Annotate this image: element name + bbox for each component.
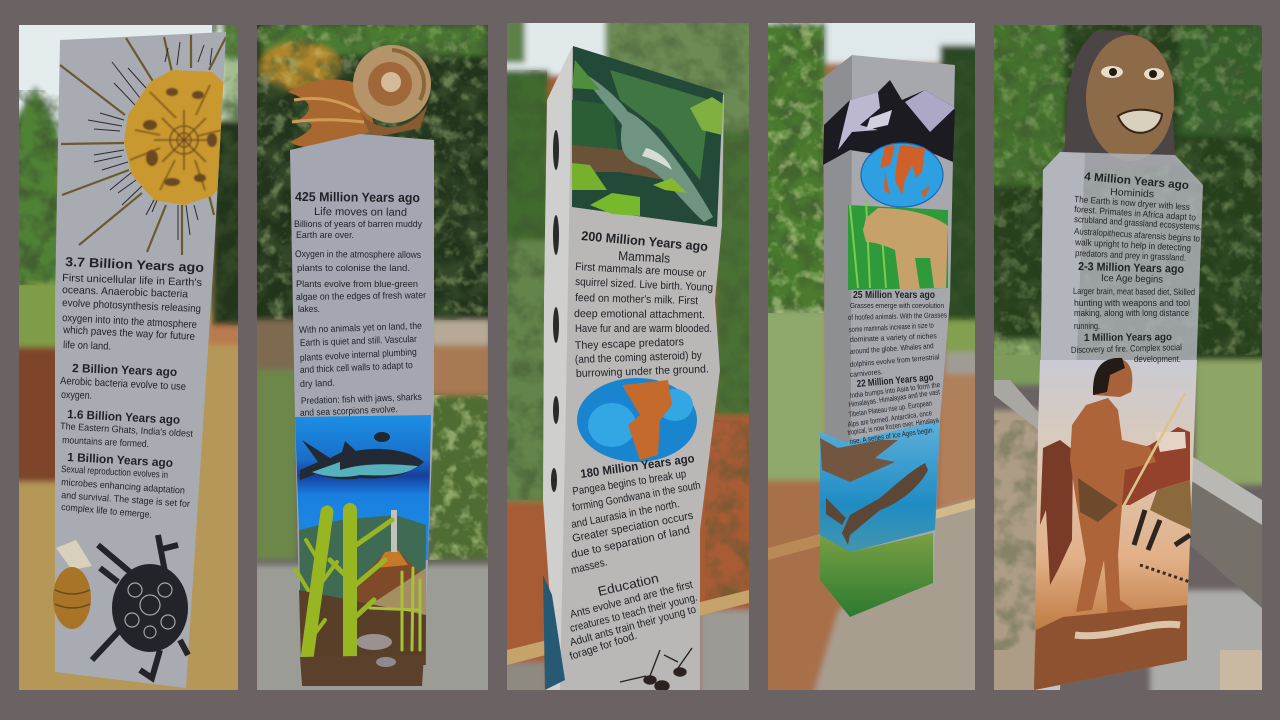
text: pillar 2 timeline: and sea scorpions evolve. bbox=[300, 404, 398, 419]
text: pillar 5 timeline: predators and prey in grassland. bbox=[1075, 248, 1186, 263]
text: pillar 2 timeline: plants evolve internal plumbing bbox=[300, 347, 417, 364]
text: pillar 5 timeline: scrubland and grassland ecosystems. bbox=[1074, 214, 1202, 232]
text: 180 million years ago and education: Ants evolve and are the first bbox=[569, 579, 694, 621]
painting: volcano and prehistoric plants bbox=[296, 510, 426, 686]
text: pillar 1 timeline: First unicellular life in Earth's bbox=[62, 272, 202, 289]
text: 180 million years ago and education bbox=[568, 451, 702, 663]
text: pillar 4 timeline: around the globe. Whales and bbox=[850, 341, 934, 356]
pillar side face bbox=[820, 55, 852, 617]
text: 180 million years ago and education: masses. bbox=[570, 556, 609, 577]
sculpture: hominid head bbox=[1062, 30, 1176, 170]
painting: lower side panel bbox=[543, 575, 565, 690]
text: 180 million years ago and education: due to separation of land bbox=[570, 524, 691, 561]
icon: black turtle-like creature painting bbox=[92, 535, 188, 678]
text: pillar 5 timeline: 4 Million Years ago bbox=[1084, 171, 1189, 192]
text: pillar 1 timeline: Sexual reproduction evolves in bbox=[61, 464, 168, 481]
text: pillar 1 timeline bbox=[60, 254, 204, 521]
pillar side face bbox=[1034, 152, 1085, 690]
text: pillar 2 timeline: Earth is quiet and still. Vascular bbox=[300, 334, 417, 349]
text: pillar 2 timeline: 425 Million Years ago bbox=[295, 189, 420, 205]
garden background bbox=[984, 15, 1272, 700]
icon: sun painting bbox=[60, 35, 226, 255]
text: pillar 2 timeline: Plants evolve from blue-green bbox=[296, 279, 418, 290]
text: pillar 1 timeline: oxygen. bbox=[61, 389, 92, 402]
text: pillar 1 timeline: which paves the way for future bbox=[62, 324, 195, 343]
text: pillar 5 timeline: making, along with long distance bbox=[1074, 308, 1189, 318]
text: pillar 4 timeline: Alps are formed. Antarctica, once bbox=[847, 408, 932, 429]
text: pillar 4 timeline: dolphins evolve from terrestrial bbox=[849, 352, 940, 369]
concrete walls bbox=[994, 380, 1262, 690]
wooden edging bbox=[768, 534, 820, 560]
text: pillar 2 timeline: dry land. bbox=[300, 378, 335, 390]
icon: globe with Pangea bbox=[577, 378, 697, 462]
text: pillar 5 timeline: Australopithecus afarensis begins to bbox=[1074, 226, 1200, 244]
text: pillar 2 timeline bbox=[294, 189, 426, 419]
garden background bbox=[247, 15, 497, 695]
panel: 425 million years ago bbox=[247, 15, 497, 695]
text: 180 million years ago and education: forage for food. bbox=[568, 630, 639, 663]
text: pillar 4 timeline: some mammals increase in size to bbox=[849, 321, 934, 334]
panel: 200 million years ago bbox=[507, 23, 749, 690]
text: pillar 4 timeline: Himalayas. Himalayas and the vast bbox=[848, 387, 941, 409]
text: pillar 1 timeline: mountains are formed. bbox=[62, 435, 149, 450]
pillar front face bbox=[560, 47, 724, 690]
text: 180 million years ago and education: 180 Million Years ago bbox=[579, 451, 695, 481]
text: 180 million years ago and education: Pangea begins to break up bbox=[572, 468, 687, 498]
garden background bbox=[19, 25, 238, 690]
text: 200 million years ago bbox=[574, 228, 713, 380]
text: pillar 5 timeline: walk upright to help in detecting bbox=[1074, 237, 1191, 253]
text: pillar 5 timeline: forest. Primates in Africa adapt to bbox=[1074, 204, 1196, 223]
icon: clay pot painting bbox=[53, 540, 92, 629]
painting: ocean with shark bbox=[295, 415, 431, 560]
text: pillar 4 timeline: Tibetan Plateau rise up. European bbox=[848, 398, 932, 419]
painting: early human hunter with cave art bbox=[1034, 358, 1197, 690]
text: pillar 4 timeline: 25 Million Years ago bbox=[853, 290, 935, 301]
text: pillar 2 timeline: Oxygen in the atmosphere allows bbox=[295, 249, 421, 261]
pillar side face bbox=[543, 47, 575, 690]
text: pillar 2 timeline: algae on the edges of fresh water bbox=[296, 290, 426, 303]
text: pillar 2 timeline: lakes. bbox=[298, 304, 320, 315]
text: pillar 4 timeline bbox=[847, 290, 947, 446]
painting: mountains bbox=[823, 80, 955, 165]
text: pillar 1 timeline: 1.6 Billion Years ago bbox=[67, 407, 180, 427]
text: pillar 5 timeline: 2-3 Million Years ago bbox=[1078, 261, 1184, 276]
text: pillar 4 timeline: rise. A series of Ice Ages begin. bbox=[849, 425, 934, 446]
text: pillar 1 timeline: microbes enhancing adaptation bbox=[61, 477, 185, 497]
pillar front face bbox=[850, 55, 955, 617]
text: pillar 1 timeline: 2 Billion Years ago bbox=[72, 361, 177, 379]
sculpture: nautilus bbox=[288, 45, 431, 148]
text: pillar 5 timeline: Hominids bbox=[1110, 187, 1154, 200]
text: 180 million years ago and education: Education bbox=[596, 570, 660, 599]
text: pillar 1 timeline: and survival. The stage is set for bbox=[61, 490, 190, 510]
pillar front face bbox=[1034, 152, 1203, 690]
painting: early mammal on branch bbox=[572, 46, 723, 227]
text: 200 million years ago: Mammals bbox=[618, 248, 671, 266]
text: pillar 1 timeline: complex life to emerge. bbox=[61, 502, 152, 521]
pillar stone bbox=[55, 32, 226, 688]
text: 180 million years ago and education: Adult ants train their young to bbox=[569, 604, 697, 649]
text: 180 million years ago and education: creatures to teach their young. bbox=[569, 592, 699, 635]
text: pillar 5 timeline: 1 Million Years ago bbox=[1084, 331, 1172, 344]
icon: globe bbox=[861, 143, 943, 207]
text: pillar 1 timeline: oceans. Anaerobic bacteria bbox=[62, 284, 188, 300]
text: pillar 4 timeline: 22 Million Years ago bbox=[856, 372, 934, 390]
text: pillar 4 timeline: tropical, is now frozen over. Himalaya bbox=[847, 415, 940, 437]
text: pillar 2 timeline: Billions of years of barren muddy bbox=[294, 219, 422, 230]
panel: 25 and 22 million years ago bbox=[768, 23, 975, 690]
text: 200 million years ago: They escape predators bbox=[575, 336, 685, 352]
text: 180 million years ago and education: forming Gondwana in the south bbox=[571, 480, 702, 514]
text: pillar 5 timeline: hunting with weapons and tool bbox=[1074, 298, 1190, 308]
text: pillar 4 timeline: of hoofed animals. With the Grasses bbox=[848, 310, 947, 322]
panel: 4 million to 1 million years ago bbox=[984, 15, 1272, 700]
panel: 3.7 billion to 1 billion years ago bbox=[19, 25, 238, 690]
text: pillar 1 timeline: Aerobic bacteria evolve to use bbox=[60, 375, 186, 393]
text: pillar 5 timeline: running. bbox=[1074, 321, 1100, 331]
text: 200 million years ago: deep emotional attachment. bbox=[574, 308, 705, 321]
text: pillar 5 timeline bbox=[1071, 171, 1202, 364]
text: pillar 5 timeline: The Earth is now dryer with less bbox=[1074, 194, 1191, 212]
text: 200 million years ago: Have fur and are warm blooded. bbox=[575, 323, 712, 335]
text: pillar 2 timeline: and thick cell walls to adapt to bbox=[300, 360, 413, 376]
wooden edging bbox=[507, 590, 749, 665]
text: 200 million years ago: feed on mother's milk. First bbox=[575, 292, 698, 307]
garden background bbox=[507, 23, 749, 690]
text: 200 million years ago: (and the coming asteroid) by bbox=[575, 350, 702, 366]
text: pillar 5 timeline: development. bbox=[1134, 354, 1181, 364]
text: pillar 4 timeline: carnivores. bbox=[849, 367, 883, 379]
text: 180 million years ago and education: and Laurasia in the north. bbox=[570, 498, 681, 531]
text: pillar 1 timeline: oxygen into into the atmosphere bbox=[62, 312, 197, 331]
painting: hoofed mammal in grass bbox=[848, 200, 948, 290]
garden background bbox=[768, 23, 975, 690]
text: 180 million years ago and education: Greater speciation occurs bbox=[571, 510, 695, 545]
text: 200 million years ago: squirrel sized. Live birth. Young bbox=[575, 276, 713, 294]
text: pillar 1 timeline: 3.7 Billion Years ago bbox=[65, 254, 204, 275]
text: pillar 5 timeline: Discovery of fire. Complex social bbox=[1071, 342, 1182, 355]
text: 200 million years ago: 200 Million Years ago bbox=[581, 228, 709, 254]
text: pillar 5 timeline: Ice Age begins bbox=[1101, 273, 1163, 286]
text: pillar 4 timeline: India bumps into Asia to form the bbox=[849, 380, 941, 400]
text: pillar 4 timeline: Grasses emerge with coevolution bbox=[850, 301, 944, 310]
text: pillar 1 timeline: life on land. bbox=[63, 339, 111, 353]
text: pillar 2 timeline: Life moves on land bbox=[314, 206, 407, 219]
text: pillar 2 timeline: Earth are over. bbox=[296, 230, 354, 241]
text: 200 million years ago: First mammals are mouse or bbox=[575, 261, 707, 280]
text: 200 million years ago: burrowing under the ground. bbox=[576, 363, 709, 380]
text: pillar 2 timeline: Predation: fish with jaws, sharks bbox=[301, 392, 422, 407]
text: pillar 1 timeline: evolve photosynthesis releasing bbox=[62, 297, 201, 315]
text: pillar 4 timeline: dominate a variety of niches bbox=[850, 331, 937, 344]
painting: water with otter bbox=[820, 420, 940, 617]
text: pillar 1 timeline: 1 Billion Years ago bbox=[67, 450, 173, 470]
dark pillar side markings bbox=[551, 130, 559, 492]
text: pillar 1 timeline: The Eastern Ghats, India's oldest bbox=[60, 421, 194, 440]
icon: ants bbox=[620, 648, 692, 691]
pillar stone bbox=[290, 134, 434, 686]
text: pillar 5 timeline: Larger brain, meat based diet, Skilled bbox=[1073, 286, 1195, 297]
text: pillar 2 timeline: With no animals yet on land, the bbox=[299, 321, 422, 336]
text: pillar 2 timeline: plants to colonise the land. bbox=[297, 263, 410, 274]
